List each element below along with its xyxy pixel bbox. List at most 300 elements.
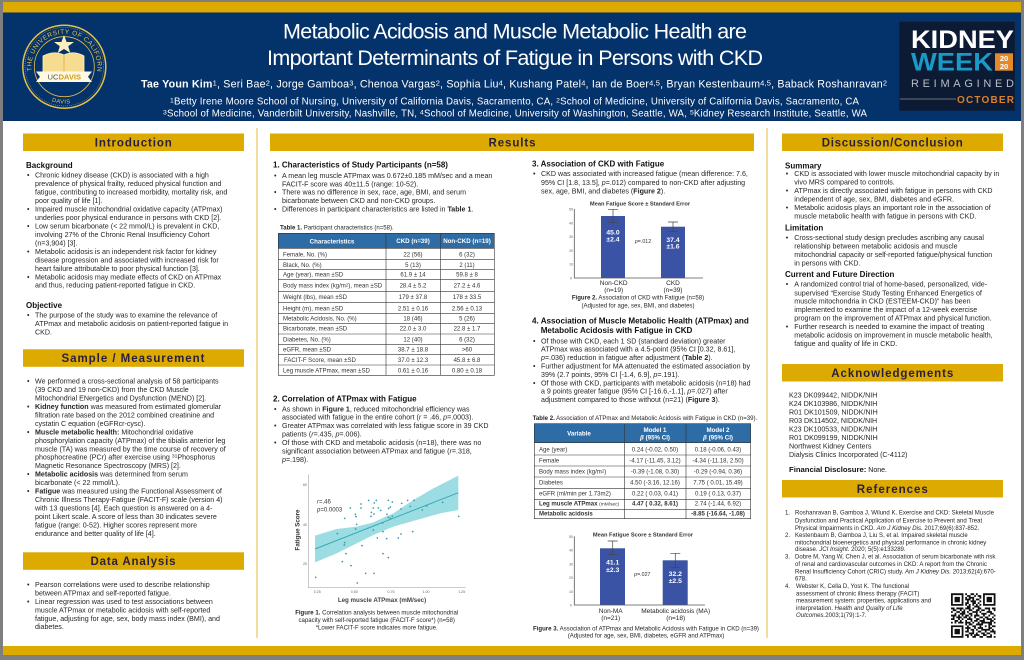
reference list: 1. xyxy=(785,511,790,517)
text block: background: Background xyxy=(26,161,73,170)
chart: mean fatigue score by CKD group: 30 xyxy=(569,235,573,239)
axis tick labels: 1.00 xyxy=(422,590,430,594)
bar values xyxy=(606,229,680,251)
table 2: 0.24 (-0.02, 0.50) xyxy=(632,448,678,454)
section 4 text: p=.036) reduction in fatigue after adjustment (Table 2). xyxy=(540,354,713,362)
text block: limitation xyxy=(785,223,992,267)
table 2: β (95% CI) xyxy=(639,434,670,441)
table 1: 61.9 ± 14 xyxy=(400,272,426,278)
y axis label: Fatigue Score xyxy=(294,509,302,550)
section 3 heading: 3. Association of CKD with Fatigue xyxy=(532,159,665,168)
text block: summary: independent of age, sex, BMI, diabetes and eGFR. xyxy=(794,195,954,203)
table 1: Body mass index (kg/m2), mean ±SD xyxy=(283,282,383,289)
reference list: Outcomes.2003;1(79):1-7. xyxy=(796,613,867,619)
text block: grants: K23 DK099442, NIDDK/NIH xyxy=(789,392,877,400)
chart: mean fatigue score by metabolic acidosis: 50 xyxy=(569,535,573,539)
section 2 text: patients (r=.435, p=.006). xyxy=(282,430,362,438)
table 2: Age (year) xyxy=(539,448,567,454)
text block: background: heart failure attributable to poor physical function [3]. xyxy=(35,265,200,273)
section 1 text: A mean leg muscle ATPmax was 0.672±0.185 mM/sec and a mean xyxy=(282,172,492,180)
text block: sample details: Mitochondrial ENergetics and Dysfunction (MEND) [2]. xyxy=(35,395,206,403)
reference list: interpretation. Health and Quality of Life xyxy=(796,606,903,612)
panel: sample and measurement xyxy=(23,349,244,538)
table 1: Leg muscle ATPmax, mean ±SD xyxy=(283,368,371,374)
text block: analysis methods: • xyxy=(27,581,30,589)
text block: summary: ATPmax is directly associated with fatigue in persons with CKD xyxy=(794,187,992,195)
reference list: 2. xyxy=(785,533,790,539)
text block: grants: K23 DK100533, NIDDK/NIH xyxy=(789,425,877,433)
axis tick labels xyxy=(303,483,465,594)
table 1: Height (m), mean ±SD xyxy=(283,306,344,312)
text block: summary: muscle metabolic health with fatigue in persons with CKD. xyxy=(794,213,976,221)
section 1 text: • xyxy=(274,205,277,213)
table 2: eGFR (ml/min per 1.73m2) xyxy=(539,491,611,497)
bar values: 32.2 xyxy=(669,571,682,578)
chart: mean fatigue score by CKD group: 20 xyxy=(569,249,573,253)
reference list: Webster K, Cella D, Yost K. The functional xyxy=(796,584,909,590)
bar values: 41.1 xyxy=(606,560,620,566)
table 2: 7.75 ( 0.01, 15.49) xyxy=(693,480,743,486)
figure 3 caption: Figure 3. Association of ATPmax and Metabolic Acidosis with Fatigue in CKD (n=39) xyxy=(533,626,759,632)
text block: objective: • xyxy=(27,312,30,320)
text block: future direction: fatigue and quality of life in CKD. xyxy=(794,340,897,348)
text block: background: Metabolic acidosis is an independent risk factor for kidney xyxy=(35,248,217,256)
affiliations xyxy=(163,97,868,120)
section 4 text: 39% (2.7 points, 95% CI [-1.4, 6.9], p=.191). xyxy=(541,371,680,379)
table 2: -4.17 (-11.45, 3.12) xyxy=(629,459,681,465)
section 4 text: ATPmax was associated with a 4.5-point (95% CI [0.32, 8.61], xyxy=(541,345,735,353)
text block: sample details: • xyxy=(27,488,30,496)
table 2 xyxy=(533,416,757,519)
p value: p=.027 xyxy=(633,572,651,578)
section 4 heading: 4. Association of Muscle Metabolic Health (ATPmax) and xyxy=(532,316,749,326)
table 1: 22 (56) xyxy=(403,252,423,258)
table 2: Model 2 xyxy=(706,427,730,434)
section 4 text: • xyxy=(533,363,536,371)
table 1: FACIT-F Score, mean ±SD xyxy=(284,358,357,364)
text block: objective: ATPmax and metabolic acidosis on patient-reported fatigue in xyxy=(35,320,228,328)
financial disclosure: Financial Disclosure: None. xyxy=(789,465,887,474)
reference list: 3. xyxy=(785,555,790,561)
text block: grants: R01 DK099199, NIDDK/NIH xyxy=(789,434,878,442)
text block: summary: Summary xyxy=(785,161,822,170)
category labels: CKD xyxy=(666,280,680,287)
text block: sample details: • xyxy=(27,471,30,479)
text block: sample details: Chronic Illness Therapy-Fatigue (FACIT-F) scale (version 4) xyxy=(35,496,223,504)
reference list: Roshanravan B, Gamboa J, Wilund K. Exercise and CKD: Skeletal Muscle xyxy=(795,511,995,517)
text block: summary: CKD is associated with lower muscle mitochondrial capacity by in xyxy=(794,170,999,178)
chart: mean fatigue score by metabolic acidosis: 30 xyxy=(569,562,573,566)
x axis label: Leg muscle ATPmax (mM/sec) xyxy=(338,597,426,604)
regression line xyxy=(315,493,458,549)
text block: objective: Objective xyxy=(26,301,63,310)
section 2 text: Of those with CKD and metabolic acidosis (n=18), there was no xyxy=(282,439,481,447)
section 1 text: Differences in participant characteristics are listed in Table 1. xyxy=(282,205,473,213)
text block: future direction: implemented to examine the impact of a 12-week exercise xyxy=(794,306,977,314)
text block: sample details: filtration rate based on the 2012 combined creatinine and xyxy=(35,412,214,420)
category labels xyxy=(599,608,710,622)
text block: future direction: Further research is needed to examine the impact of treating xyxy=(794,323,984,331)
table 1: 27.2 ± 4.6 xyxy=(454,283,481,289)
panel: introduction xyxy=(23,134,244,336)
category labels: Non-CKD xyxy=(600,280,628,287)
table 2: 2.74 (-1.44, 6.92) xyxy=(695,502,741,508)
table 2: Diabetes xyxy=(539,480,563,486)
text block: sample details: bicarbonate (< 22 mmol/L). xyxy=(35,479,120,487)
heading: Results: Results xyxy=(488,137,536,149)
figure 2 caption: (Adjusted for age, sex, BMI, and diabetes) xyxy=(582,303,694,309)
text block: grants: Northwest Kidney Centers xyxy=(789,443,872,451)
bar values: ±2.5 xyxy=(669,578,682,585)
authors: Tae Youn Kim1, Seri Bae2, Jorge Gamboa3, Chenoa Vargas2, Sophia Liu4, Kushang Patel4, Ian de Boer4,5, Bryan Kestenbaum4,5, Baback Roshanravan2 xyxy=(141,78,887,91)
section 3 text: 95% CI [1.8, 13.5], p=.012) compared to non-CKD after adjusting xyxy=(541,179,745,187)
text block: future direction: Current and Future Direction xyxy=(785,270,894,279)
panel: acknowledgements xyxy=(782,364,1003,474)
text block: grants: R01 DK101509, NIDDK/NIH xyxy=(789,409,878,417)
text block: background: (n=3,904) [3]. xyxy=(35,239,77,247)
table 2: -0.39 (-1.08, 0.30) xyxy=(631,470,679,476)
table 1: 178 ± 33.5 xyxy=(453,295,482,301)
panel: results xyxy=(270,134,759,640)
table 1 xyxy=(278,226,494,375)
table 1: 38.7 ± 18.8 xyxy=(398,348,429,354)
table 2: 0.22 ( 0.03, 0.41) xyxy=(632,491,678,497)
section 1 text: • xyxy=(274,188,277,196)
text block: objective xyxy=(26,301,228,336)
text block: limitation: relationship between metabolic acidosis and muscle xyxy=(794,242,958,250)
table 1: 22.8 ± 1.7 xyxy=(454,327,481,333)
figure 2 caption: Figure 2. Association of CKD with Fatigue (n=58) xyxy=(572,296,704,302)
category labels: Non-MA xyxy=(599,608,623,615)
text block: objective: CKD. xyxy=(35,328,52,336)
table 1: Metabolic Acidosis, No. (%) xyxy=(283,317,357,323)
heading: Results xyxy=(270,134,754,151)
text block: future direction xyxy=(785,270,993,348)
table 2: Metabolic acidosis xyxy=(539,512,593,518)
text block: sample details: Kidney function was measured from estimated glomerular xyxy=(35,403,222,411)
panel: data analysis xyxy=(23,552,244,631)
table 1: Non-CKD (n=19) xyxy=(443,238,491,245)
chart: mean fatigue score by metabolic acidosis: 0 xyxy=(570,604,572,608)
logo: Kidney Week 2020: REIMAGINED xyxy=(911,78,1014,90)
section 4 text: • xyxy=(533,379,536,387)
section 1 text: • xyxy=(274,172,277,180)
bars xyxy=(600,548,625,605)
heading: Acknowledgements: Acknowledgements xyxy=(831,368,953,380)
section 4 text: Of those with CKD, each 1 SD (standard deviation) greater xyxy=(541,337,726,345)
chart: mean fatigue score by metabolic acidosis: 20 xyxy=(569,576,573,580)
text block: limitation: in persons with CKD. xyxy=(794,259,861,267)
table 1: 22.0 ± 3.0 xyxy=(400,327,427,333)
reference list: disease. JCI Insight. 2020; 5(5):e133289. xyxy=(795,547,906,553)
text block: analysis methods: muscle ATPmax or metabolic acidosis with self-reported xyxy=(35,606,210,614)
text block: analysis methods: Pearson correlations were used to describe relationship xyxy=(35,581,210,589)
table 1: eGFR, mean ±SD xyxy=(283,348,332,354)
error bars xyxy=(608,541,680,567)
section 2 text: As shown in Figure 1, reduced mitochondrial efficiency was xyxy=(282,405,470,413)
table 1: 5 (26) xyxy=(459,317,475,323)
axis tick labels: 0.25 xyxy=(314,590,321,594)
section 2 text: associated with fatigue in the entire cohort (r = .46, p=.0003). xyxy=(282,414,473,422)
chart: mean fatigue score by metabolic acidosis: 10 xyxy=(569,590,573,594)
text block: background: Low serum bicarbonate (< 22 mmol/L) is prevalent in CKD, xyxy=(35,222,219,230)
text block: future direction: A randomized control trial of home-based, personalized, vide- xyxy=(794,281,988,289)
section 1 text: There was no difference in sex, race, age, BMI, and serum xyxy=(282,188,466,196)
text block: summary: Metabolic acidosis plays an important role in the association of xyxy=(794,204,991,212)
reference list: mitochondrial bioenergetics and physical performance in chronic kidney xyxy=(795,540,987,546)
bar values: ±1.6 xyxy=(666,244,680,251)
icon: UC Davis seal: UCDAVIS xyxy=(47,73,81,82)
text block: analysis methods: Linear regression was used to test associations between xyxy=(35,598,213,606)
text block: sample details: • xyxy=(27,378,30,386)
table 1: 2 (11) xyxy=(459,263,475,269)
text block: grants xyxy=(789,392,908,459)
section 1 text: bicarbonate between CKD and non-CKD groups. xyxy=(282,197,435,205)
text block: objective: The purpose of the study was to examine the relevance of xyxy=(35,312,217,320)
logo: Kidney Week 2020: KIDNEY xyxy=(911,26,1014,54)
heading: References xyxy=(782,480,1003,498)
table 1: 18 (46) xyxy=(403,317,423,323)
text block: background: • xyxy=(27,248,30,256)
axis tick labels: 1.25 xyxy=(458,590,465,594)
section 2 text: • xyxy=(274,439,277,447)
table 1: 2.51 ± 0.16 xyxy=(398,306,429,312)
bar values: 45.0 xyxy=(606,229,620,236)
bar values: ±2.3 xyxy=(606,567,620,574)
reference list: 4. xyxy=(785,584,790,590)
text block: sample details: • xyxy=(27,428,30,436)
text block: future direction: metabolic acidosis on improvement in muscle metabolic health, xyxy=(794,332,993,340)
table 2: β (95% CI) xyxy=(702,434,733,441)
text block: sample details xyxy=(27,378,226,538)
category labels: (n=39) xyxy=(664,287,682,294)
p value: p=.012 xyxy=(634,239,651,245)
text block: sample details: • xyxy=(27,403,30,411)
table 2: 4.47 ( 0.32, 8.61) xyxy=(632,502,678,508)
text block: background: disease progression and associated with increased risk for xyxy=(35,256,219,264)
section 2 heading: 2. Correlation of ATPmax with Fatigue xyxy=(273,394,417,403)
section 3 text: CKD was associated with increased fatigue (mean difference: 7.6, xyxy=(541,170,748,178)
table 2: -0.29 (-0.94, 0.36) xyxy=(694,470,742,476)
text block: analysis methods: between ATPmax and self-reported fatigue. xyxy=(35,589,171,597)
logo: Kidney Week 2020: 20 xyxy=(1000,54,1008,63)
text block: analysis methods xyxy=(27,581,220,631)
text block: grants: K24 DK103986, NIDDK/NIH xyxy=(789,400,877,408)
table 2: 0.18 (-0.06, 0.43) xyxy=(695,448,741,454)
heading: Introduction xyxy=(23,134,244,151)
table 1 caption: Table 1. Participant characteristics (n=58). xyxy=(280,226,394,232)
category labels: (n=21) xyxy=(601,615,620,622)
heading: Introduction: Introduction xyxy=(95,137,172,149)
text block: future direction: • xyxy=(786,323,789,331)
text block: limitation: mitochondrial capacity or self-reported fatigue/physical function xyxy=(794,251,992,259)
text block: sample details: Fatigue was measured using the Functional Assessment of xyxy=(35,488,222,496)
section 2 text: • xyxy=(274,422,277,430)
reference list: Kestenbaum B, Gamboa J, Liu S, et al. Impaired skeletal muscle xyxy=(795,533,968,539)
data points xyxy=(315,499,460,584)
correlation annotation: p=0.0003 xyxy=(316,508,343,514)
text block: grants: Dialysis Clinics Incorporated (C-4112) xyxy=(789,451,908,459)
section 4 heading xyxy=(532,316,749,335)
text block: sample details: phosphocreatine (PCr) after exercise using 31Phosphorus xyxy=(35,454,216,462)
section 1 heading: 1. Characteristics of Study Participants (n=58) xyxy=(273,160,448,170)
table 1: 37.0 ± 12.3 xyxy=(398,358,429,364)
table 1: Age (year), mean ±SD xyxy=(283,272,344,278)
section 4 text: • xyxy=(533,337,536,345)
text block: background: Impaired muscle mitochondrial oxidative capacity (ATPmax) xyxy=(35,206,223,214)
text block: sample details: fatigue (range: 0-52). Higher scores represent more xyxy=(35,521,197,529)
panel: references xyxy=(782,480,1003,637)
text block: sample details: with 13 questions [4]. Each question is answered on a 4- xyxy=(34,504,213,512)
section 1 text xyxy=(274,172,492,213)
text block: background: prevalence of physical frailty, reduced physical function and xyxy=(35,180,221,188)
text block: background: Metabolic acidosis may mediate effects of CKD on ATPmax xyxy=(35,273,222,281)
icon: QR code xyxy=(951,594,996,637)
text block: background: Chronic kidney disease (CKD) is associated with a high xyxy=(35,172,209,180)
text block: summary: • xyxy=(786,170,789,178)
text block: limitation: • xyxy=(786,234,789,242)
text block: sample details: Metabolic acidosis was determined from serum xyxy=(35,471,188,479)
text block: background: involving 27% of the Chronic Renal Insufficiency Cohort xyxy=(35,231,210,239)
table 1: Black, No. (%) xyxy=(283,263,322,269)
text block: analysis methods: diabetes. xyxy=(35,623,64,631)
section 4 text: a 9 points greater fatigue (95% CI [-16.6,-1.1], p=.027) after xyxy=(541,388,728,396)
table 1: 5 (13) xyxy=(405,263,421,269)
table 2: -8.85 (-16.64, -1.08) xyxy=(691,512,745,518)
error bars xyxy=(608,209,678,232)
figure 2 caption xyxy=(572,296,704,309)
table 1: 45.8 ± 6.8 xyxy=(454,358,481,364)
text block: summary: • xyxy=(786,204,789,212)
text block: sample details: muscle (TA) was measured by the time course of recovery of xyxy=(35,445,226,453)
table 1: 6 (32) xyxy=(459,252,475,258)
text block: background xyxy=(26,161,227,290)
affiliations: 1Betty Irene Moore School of Nursing, University of California Davis, Sacramento, CA, 2School of Medicine, University of California Davis, Sacramento, CA xyxy=(170,97,860,108)
reference list xyxy=(785,511,996,619)
table 2 caption: Table 2. Association of ATPmax and Metabolic Acidosis with Fatigue in CKD (n=39). xyxy=(533,416,757,422)
text block: background: fatigue, contributing to increased morbidity, mortality risk, and xyxy=(35,189,227,197)
reference list: assessment of chronic illness therapy (FACIT) xyxy=(796,591,919,597)
text block: background: poor quality of life [1]. xyxy=(35,197,102,205)
table 2: Body mass index (kg/m2) xyxy=(539,468,606,476)
reference list: Renal Insufficiency Cohort (CRIC) study. Am J Kidney Dis. 2013;62(4):670- xyxy=(795,569,996,575)
bar values xyxy=(606,560,682,585)
text block: limitation: Cross-sectional study design precludes ascribing any causal xyxy=(794,234,984,242)
logo: Kidney Week 2020 xyxy=(899,22,1015,111)
heading: Data Analysis: Data Analysis xyxy=(90,556,176,568)
heading: Data Analysis xyxy=(23,552,244,570)
text block: future direction: program on the improvement of ATPmax and physical function. xyxy=(794,314,992,322)
text block: background: underlies poor physical endurance in persons with CKD [2]. xyxy=(35,214,221,222)
axis tick labels: 40 xyxy=(303,523,307,527)
table 2: Leg muscle ATPmax (mM/sec) xyxy=(539,502,620,508)
title xyxy=(267,20,763,70)
section 4 text: adjustment compared to those without (n=21) (Figure 3). xyxy=(541,396,720,404)
chart: mean fatigue score by CKD group: 0 xyxy=(570,276,572,280)
bar values: 37.4 xyxy=(666,237,680,244)
icon: UC Davis seal: DAVIS xyxy=(52,98,70,104)
text block: future direction: supervised “Exercise Study Testing Enhanced Energetics of xyxy=(794,289,982,297)
text block: grants: R03 DK114502, NIDDK/NIH xyxy=(789,417,877,425)
text block: sample details: We performed a cross-sectional analysis of 58 participants xyxy=(35,378,219,386)
text block: background: • xyxy=(27,222,30,230)
section 2 text: • xyxy=(274,405,277,413)
title: Metabolic Acidosis and Muscle Metabolic Health are xyxy=(283,20,747,44)
correlation annotation: r=.46 xyxy=(317,500,332,506)
section 2 text: p=.198). xyxy=(281,456,308,464)
table 1: Weight (lbs), mean ±SD xyxy=(283,295,348,301)
table 1: 179 ± 37.8 xyxy=(399,295,428,301)
text block: sample details: cystatin C equation (eGFRcr-cysc). xyxy=(35,420,145,428)
text block: sample details: endurance and better quality of life [4]. xyxy=(35,530,156,538)
table 1: 6 (32) xyxy=(459,337,475,343)
text block: sample details: point Likert scale. A score of less than 30 indicates severe xyxy=(35,513,217,521)
table 1: 12 (40) xyxy=(403,337,423,343)
top gold band xyxy=(3,2,1021,12)
axis tick labels: 60 xyxy=(303,483,307,487)
correlation annotation xyxy=(316,500,343,514)
table 2: 0.19 ( 0.13, 0.37) xyxy=(695,491,741,497)
table 1: 0.80 ± 0.18 xyxy=(452,368,483,374)
chart: mean fatigue score by CKD group: 10 xyxy=(569,263,573,267)
table 1: 59.8 ± 8 xyxy=(456,272,479,278)
icon: UC Davis seal xyxy=(22,24,107,109)
bar values: ±2.4 xyxy=(606,236,620,243)
text block: analysis methods: fatigue, adjusting for age, sex, body mass index (BMI), and xyxy=(35,615,220,623)
category labels: (n=19) xyxy=(604,287,623,294)
table 2: Female xyxy=(539,459,560,465)
heading: Discussion/Conclusion xyxy=(782,134,1003,151)
section 3 text: sex, age, BMI, and diabetes (Figure 2). xyxy=(541,187,665,195)
text block: limitation: Limitation xyxy=(785,223,823,232)
reference list: of renal and cardiovascular outcomes in CKD: A report from the Chronic xyxy=(795,562,987,568)
axis tick labels: 0.75 xyxy=(388,590,394,594)
heading: Acknowledgements xyxy=(782,364,1003,382)
logo: Kidney Week 2020: WEEK xyxy=(911,48,993,76)
affiliations: 3School of Medicine, Vanderbilt University, Nashville, TN, 4School of Medicine, University of Washington, Seattle, WA, 5Kidney Research Institute, Seattle, WA xyxy=(163,109,868,120)
reference list: Dysfunction and Practical Application of Exercise to Prevent and Treat xyxy=(795,519,983,525)
text block: sample details: (39 CKD and 19 non-CKD) from the CKD Muscle xyxy=(35,386,189,394)
logo: Kidney Week 2020: OCTOBER xyxy=(957,95,1015,106)
chart: mean fatigue score by CKD group xyxy=(569,202,703,294)
heading: Discussion/Conclusion: Discussion/Conclusion xyxy=(822,137,963,149)
chart: scatter plot of fatigue vs ATPmax xyxy=(294,474,466,604)
text block: background: and thus, reducing patient-reported fatigue in CKD. xyxy=(35,282,195,290)
table 1: 0.61 ± 0.16 xyxy=(398,368,429,374)
heading: Sample / Measurement xyxy=(23,349,244,367)
category labels: (n=18) xyxy=(666,615,685,622)
chart: mean fatigue score by metabolic acidosis xyxy=(569,533,710,622)
chart: mean fatigue score by CKD group: 50 xyxy=(569,208,573,212)
figure 3 caption: (Adjusted for age, sex, BMI, diabetes, eGFR and ATPmax) xyxy=(568,634,724,640)
figure 1 caption: *Lower FACIT-F score indicates more fatigue. xyxy=(316,625,438,631)
reference list: Physical Impairments in CKD. Am J Kidney Dis. 2017;69(6):837-852. xyxy=(795,526,980,532)
header banner xyxy=(3,12,1021,121)
text block: summary xyxy=(785,161,999,221)
chart: mean fatigue score by CKD group: Mean Fatigue Score ± Standard Error xyxy=(590,202,691,208)
section 2 text: Greater ATPmax was correlated with less fatigue score in 39 CKD xyxy=(282,422,488,430)
bottom gold band xyxy=(3,646,1021,655)
text block: future direction: • xyxy=(786,281,789,289)
text block: summary: vivo MRS compared to controls. xyxy=(794,178,895,186)
table 1: Characteristics xyxy=(310,239,355,246)
figure 1 caption: capacity with self-reported fatigue (FACIT-F score*) (n=58) xyxy=(298,618,455,624)
text block: sample details: phosphorylation capacity (ATPmax) of the tibialis anterior leg xyxy=(35,437,225,445)
text block: background: • xyxy=(27,273,30,281)
section 1 text: FACIT-F score was 40±11.5 (range: 10-52). xyxy=(282,180,418,188)
table 1: Bicarbonate, mean ±SD xyxy=(283,327,348,333)
table 2: Model 1 xyxy=(643,427,667,434)
